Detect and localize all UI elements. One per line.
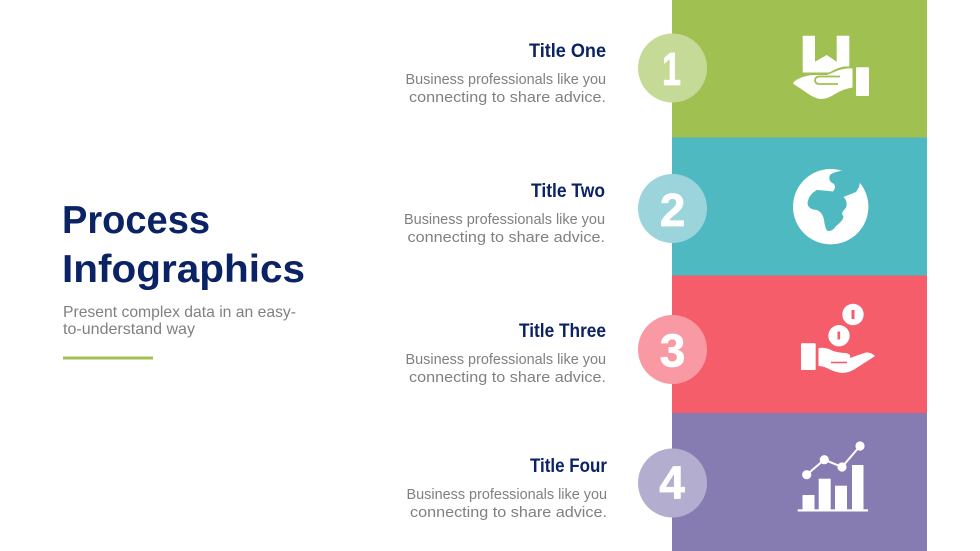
icon: hand holding box [794, 36, 869, 99]
title: Infographics [62, 248, 305, 291]
step 3 text: connecting to share advice. [409, 369, 606, 386]
number badge 2: 2 [660, 184, 685, 236]
panel: step 4 [406, 413, 927, 551]
subtitle [63, 304, 296, 338]
step 1 text: Title One [529, 41, 606, 62]
step 4 text [406, 456, 608, 521]
step 4 text: Title Four [530, 456, 608, 477]
step 1 text [406, 41, 606, 106]
step 2 text: Business professionals like you [404, 211, 605, 228]
step 4 text: connecting to share advice. [410, 504, 607, 521]
band [672, 138, 927, 276]
icon: hand with coins [801, 304, 875, 373]
accent line [63, 356, 153, 360]
number badge 3 [638, 315, 707, 384]
step 3 text [406, 321, 606, 386]
step 1 text: connecting to share advice. [409, 89, 606, 106]
step 2 text [404, 181, 605, 246]
number badge 2 [638, 174, 707, 243]
step 3 text: Title Three [519, 321, 606, 342]
band [672, 0, 927, 138]
icon: growth chart [798, 441, 868, 512]
panel: step 3 [406, 276, 927, 413]
panel: step 2 [404, 138, 927, 276]
subtitle: to-understand way [63, 321, 195, 338]
band [672, 276, 927, 413]
number badge 4: 4 [659, 456, 685, 508]
number badge 1: 1 [662, 43, 681, 95]
icon: globe [793, 169, 868, 244]
heading block [62, 199, 305, 360]
step 3 text: Business professionals like you [406, 351, 606, 368]
panel: step 1 [406, 0, 927, 138]
title [62, 199, 305, 291]
band [672, 413, 927, 551]
number badge 3: 3 [660, 324, 685, 376]
number badge 1 [638, 34, 707, 102]
step 2 text: Title Two [531, 181, 605, 202]
subtitle: Present complex data in an easy- [63, 304, 296, 321]
number badge 4 [638, 448, 707, 518]
title: Process [62, 199, 210, 242]
step 1 text: Business professionals like you [406, 71, 606, 88]
step 2 text: connecting to share advice. [408, 229, 605, 246]
step 4 text: Business professionals like you [406, 486, 607, 503]
